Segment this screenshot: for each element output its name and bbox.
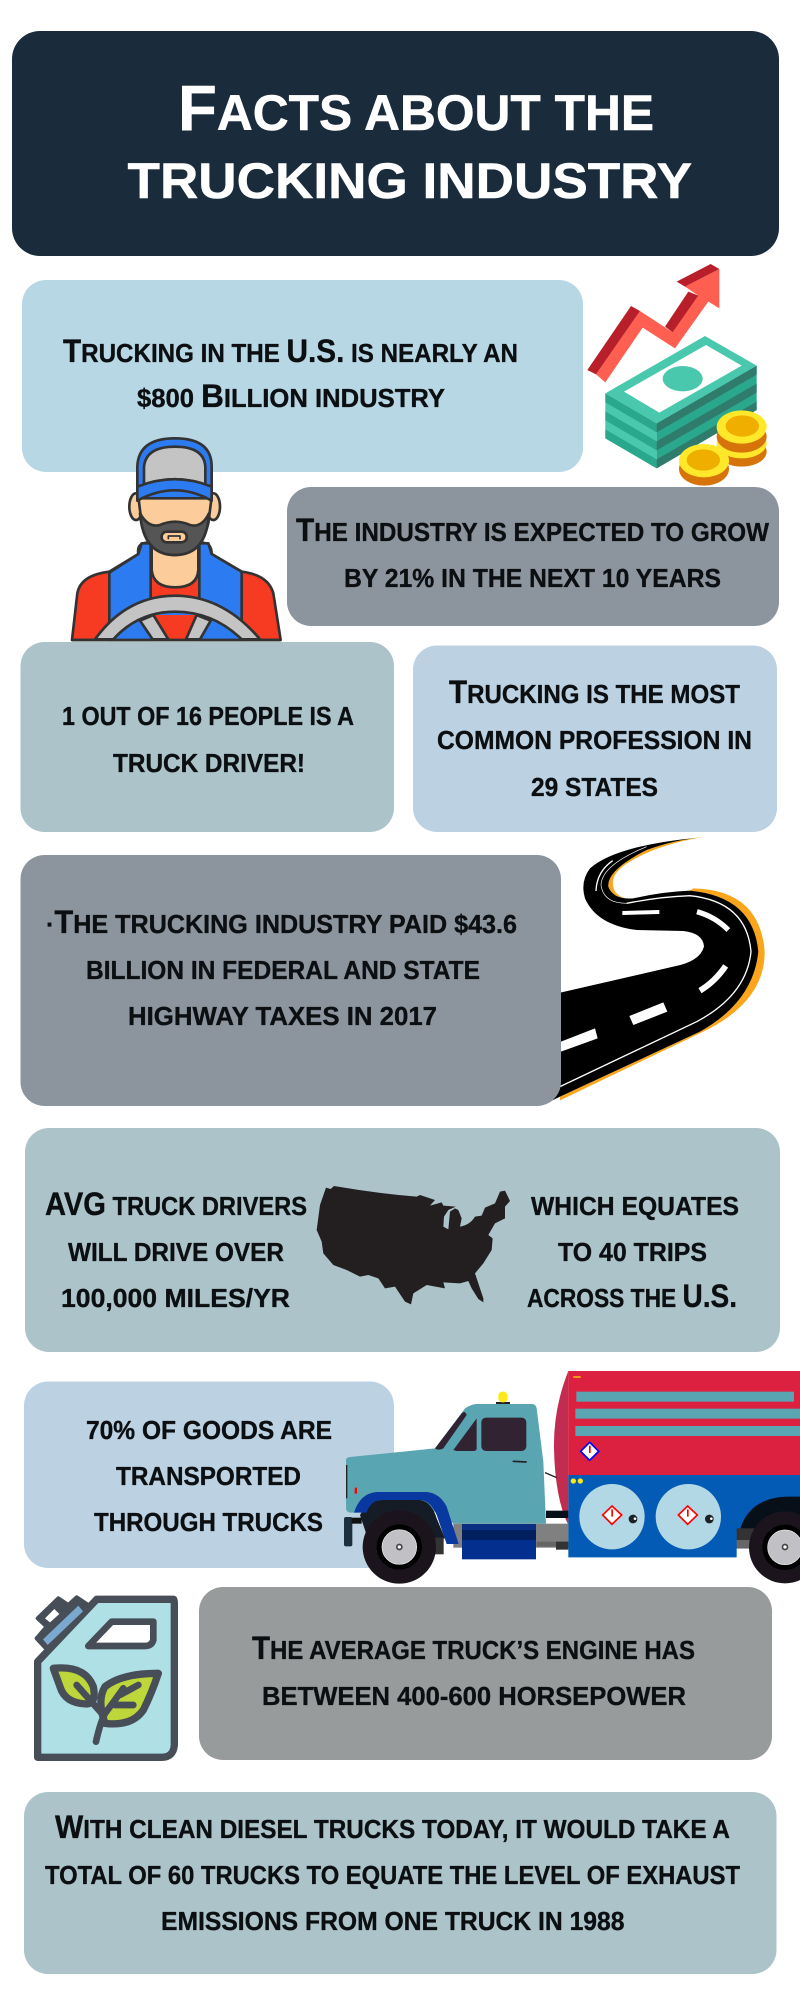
text: emissions: WITH CLEAN DIESEL TRUCKS TODAY, IT WOULD TAKE A — [55, 1809, 730, 1845]
text: goods transported: 70% OF GOODS ARE — [86, 1415, 332, 1445]
text: emissions — [45, 1809, 740, 1936]
panel: engine horsepower — [199, 1587, 772, 1760]
panel: 1 out of 16 — [20, 642, 394, 832]
title: FACTS ABOUT THE — [178, 72, 654, 144]
text: highway taxes: HIGHWAY TAXES IN 2017 — [128, 1001, 437, 1031]
text: growth — [296, 512, 769, 593]
text: most common profession: COMMON PROFESSION IN — [437, 725, 752, 755]
text: most common profession: TRUCKING IS THE MOST — [449, 674, 740, 710]
text: growth: BY 21% IN THE NEXT 10 YEARS — [344, 563, 721, 593]
text: highway taxes — [46, 904, 517, 1031]
text: 1 out of 16 — [62, 701, 354, 778]
panel: most common profession — [413, 646, 777, 832]
panel: goods transported — [24, 1382, 394, 1568]
text: miles per year — [45, 1186, 307, 1313]
panel: title banner — [12, 31, 779, 256]
panel: $800 billion industry — [22, 280, 583, 472]
text: goods transported: TRANSPORTED — [116, 1461, 301, 1491]
icon: money stack with rising arrow — [587, 264, 767, 486]
panel: miles driven — [25, 1128, 780, 1352]
panel: expected growth — [287, 487, 779, 626]
text: industry size: $800 BILLION INDUSTRY — [137, 378, 445, 414]
panel: clean diesel emissions — [24, 1792, 776, 1974]
text: 1 out of 16: TRUCK DRIVER! — [113, 748, 305, 778]
text: horsepower: BETWEEN 400-600 HORSEPOWER — [262, 1681, 686, 1711]
text: industry size — [63, 333, 518, 414]
text: miles per year: 100,000 MILES/YR — [61, 1283, 290, 1313]
text: miles per year: WILL DRIVE OVER — [68, 1237, 284, 1267]
text: most common profession: 29 STATES — [531, 772, 658, 802]
text: horsepower: THE AVERAGE TRUCK’S ENGINE HAS — [252, 1630, 695, 1666]
text: emissions: TOTAL OF 60 TRUCKS TO EQUATE THE LEVEL OF EXHAUST — [45, 1860, 740, 1890]
text: most common profession — [437, 674, 752, 802]
icon: tanker truck — [344, 1371, 800, 1584]
title — [128, 72, 692, 209]
text: highway taxes: ·THE TRUCKING INDUSTRY PAID $43.6 — [46, 904, 517, 940]
text: emissions: EMISSIONS FROM ONE TRUCK IN 1988 — [161, 1906, 624, 1936]
panel: highway taxes — [20, 855, 561, 1106]
text: miles per year: AVG TRUCK DRIVERS — [45, 1186, 307, 1222]
text: trips across the U.S.: TO 40 TRIPS — [558, 1237, 707, 1267]
text: trips across the U.S. — [527, 1191, 739, 1314]
icon: clean fuel can with leaves — [37, 1597, 174, 1757]
title: TRUCKING INDUSTRY — [128, 153, 692, 209]
icon: map of the United States — [317, 1186, 510, 1304]
text: 1 out of 16: 1 OUT OF 16 PEOPLE IS A — [62, 701, 354, 731]
text: horsepower — [252, 1630, 695, 1711]
text: industry size: TRUCKING IN THE U.S. IS NEARLY AN — [63, 333, 518, 369]
text: goods transported: THROUGH TRUCKS — [94, 1507, 323, 1537]
text: trips across the U.S.: ACROSS THE U.S. — [527, 1278, 737, 1314]
text: goods transported — [86, 1415, 332, 1537]
text: trips across the U.S.: WHICH EQUATES — [531, 1191, 739, 1221]
text: growth: THE INDUSTRY IS EXPECTED TO GROW — [296, 512, 769, 548]
icon: truck driver — [72, 438, 281, 640]
icon: winding road — [550, 837, 765, 1102]
text: highway taxes: BILLION IN FEDERAL AND STATE — [86, 955, 480, 985]
